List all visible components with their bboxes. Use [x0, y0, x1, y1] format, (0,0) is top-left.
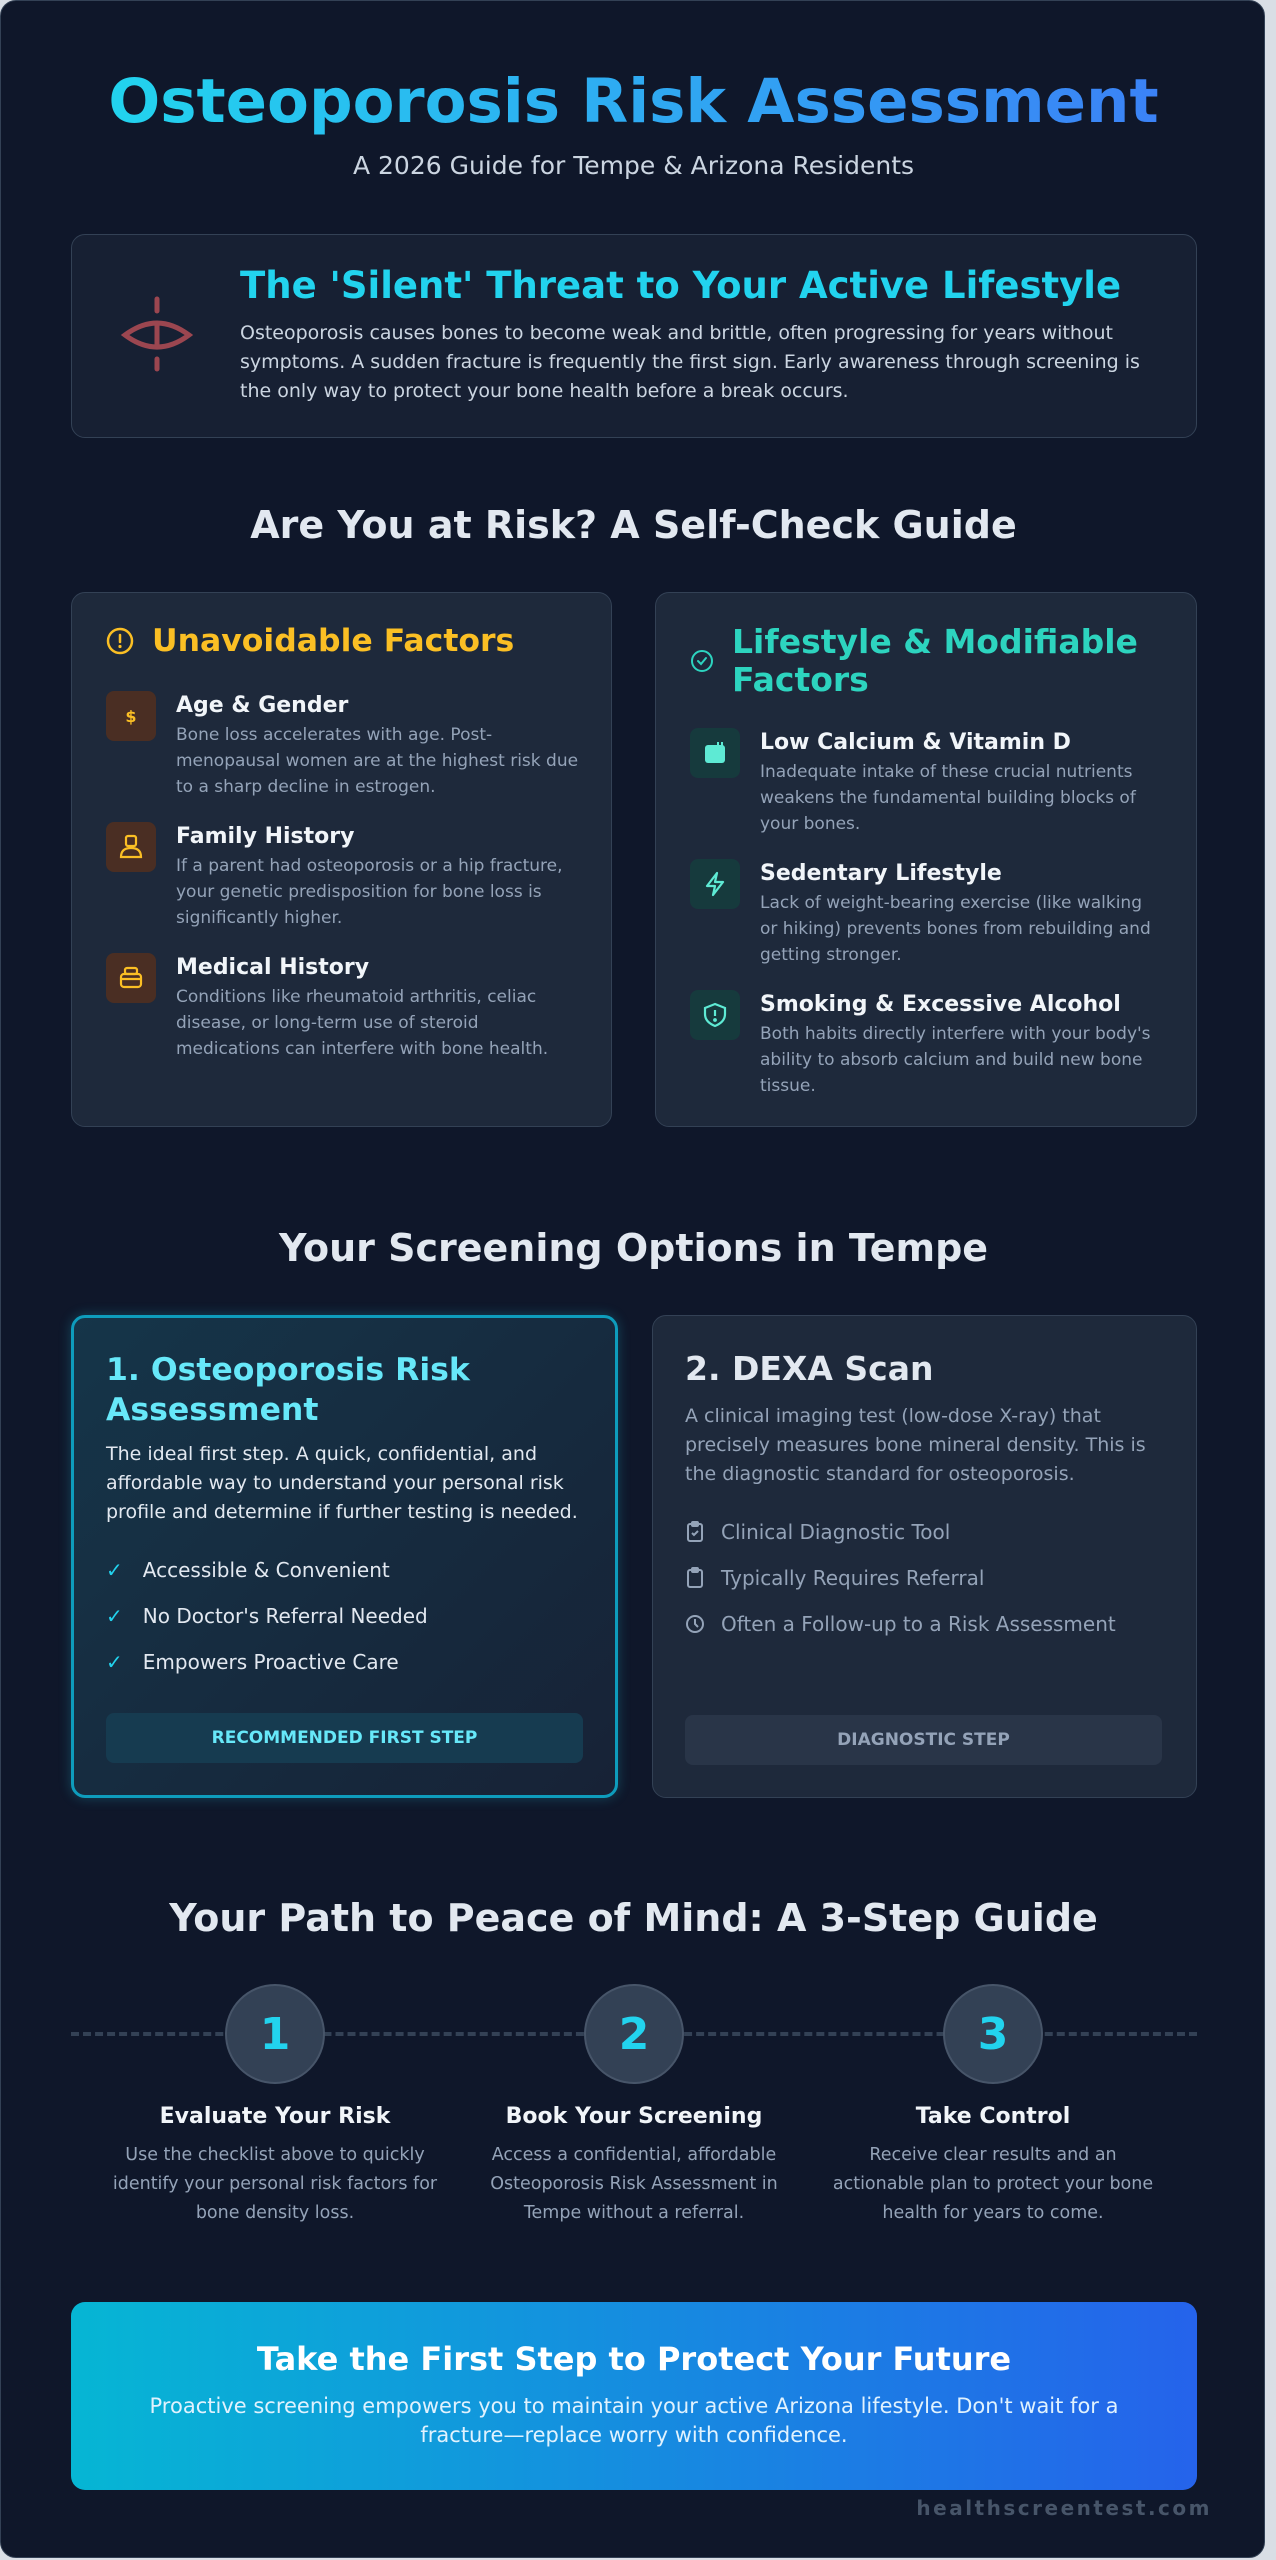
item: medical: Medical History	[176, 955, 369, 980]
heading: The 'Silent' Threat to Your Active Lifestyle	[240, 264, 1121, 307]
item: sedentary: Lack of weight-bearing exercise (like walking or hiking) prevents bones from rebuilding and getting stronger.	[760, 893, 1151, 965]
checklist: No Doctor's Referral Needed	[143, 1604, 428, 1628]
item: calcium: Inadequate intake of these crucial nutrients weakens the fundamental building blocks of your bones.	[760, 762, 1136, 834]
step 1: Evaluate Your Risk	[160, 2104, 390, 2129]
badge: RECOMMENDED FIRST STEP	[212, 1728, 477, 1748]
heading: 3-step guide: Your Path to Peace of Mind: A 3-Step Guide	[169, 1896, 1098, 1940]
step 3: Take Control	[916, 2104, 1070, 2129]
body text: Osteoporosis causes bones to become weak and brittle, often progressing for years without symptoms. A sudden fracture is frequently the first sign. Early awareness through screening is the only way to protect your bone health before a break occurs.	[240, 322, 1140, 402]
step 1: 1	[260, 2008, 290, 2060]
checklist: ✓	[106, 1558, 123, 1582]
feature list: Clinical Diagnostic Tool	[721, 1520, 950, 1544]
cta title: Take the First Step to Protect Your Future	[257, 2340, 1011, 2378]
heading: screening options: Your Screening Options in Tempe	[279, 1226, 988, 1270]
icon: eye	[121, 296, 193, 372]
card heading: 1. Osteoporosis Risk	[106, 1352, 470, 1388]
panel: DEXA option	[652, 1315, 1197, 1798]
card description: A clinical imaging test (low-dose X-ray) that precisely measures bone mineral density. This is the diagnostic standard for osteoporosis.	[685, 1405, 1146, 1485]
checklist: ✓	[106, 1650, 123, 1674]
checklist: Accessible & Convenient	[143, 1558, 390, 1582]
item: smoking	[690, 990, 1151, 1096]
checklist	[106, 1558, 428, 1674]
card heading: Assessment	[106, 1392, 318, 1428]
card description: The ideal first step. A quick, confidential, and affordable way to understand your personal risk profile and determine if further testing is needed.	[106, 1443, 578, 1523]
panel: unavoidable factors	[71, 592, 612, 1127]
step 1: Use the checklist above to quickly identify your personal risk factors for bone density loss.	[113, 2145, 437, 2223]
dashed connector line	[71, 2032, 1197, 2036]
badge	[106, 1713, 583, 1763]
item: age	[106, 691, 578, 797]
feature list: Often a Follow-up to a Risk Assessment	[721, 1612, 1116, 1636]
item: age: Bone loss accelerates with age. Post-menopausal women are at the highest risk due to a sharp decline in estrogen.	[176, 725, 578, 797]
card heading: 2. DEXA Scan	[685, 1349, 933, 1388]
footer brand: healthscreentest.com	[916, 2496, 1212, 2520]
panel heading	[691, 622, 1138, 699]
heading: self-check: Are You at Risk? A Self-Check Guide	[250, 503, 1017, 547]
step 2: Access a confidential, affordable Osteoporosis Risk Assessment in Tempe without a referral.	[490, 2145, 778, 2223]
item: smoking: Smoking & Excessive Alcohol	[760, 992, 1121, 1017]
cta text: Proactive screening empowers you to maintain your active Arizona lifestyle. Don't wait for a fracture—replace worry with confidence.	[150, 2394, 1118, 2447]
badge: DIAGNOSTIC STEP	[837, 1730, 1010, 1750]
card heading	[106, 1352, 470, 1428]
title: Osteoporosis Risk Assessment	[108, 66, 1159, 137]
panel: lifestyle factors	[655, 592, 1197, 1127]
checklist: ✓	[106, 1604, 123, 1628]
item: sedentary: Sedentary Lifestyle	[760, 861, 1002, 886]
item: medical	[106, 953, 548, 1059]
feature list: Typically Requires Referral	[721, 1566, 984, 1590]
item: smoking: Both habits directly interfere with your body's ability to absorb calcium and build new bone tissue.	[760, 1024, 1151, 1096]
step 1	[113, 1984, 438, 2223]
step 2: Book Your Screening	[506, 2104, 762, 2129]
item: calcium	[690, 728, 1136, 834]
item: family	[106, 822, 563, 928]
step 3: Receive clear results and an actionable plan to protect your bone health for years to come.	[833, 2145, 1153, 2223]
item: family: If a parent had osteoporosis or a hip fracture, your genetic predisposition for bone loss is significantly higher.	[176, 856, 563, 928]
panel heading: Lifestyle & Modifiable	[732, 622, 1138, 661]
subtitle: A 2026 Guide for Tempe & Arizona Residents	[353, 151, 914, 180]
item: medical: Conditions like rheumatoid arthritis, celiac disease, or long-term use of steroid medications can interfere with bone health.	[176, 987, 548, 1059]
feature list	[686, 1520, 1116, 1636]
item: age: Age & Gender	[176, 693, 348, 718]
item: family: Family History	[176, 824, 354, 849]
item: age: $	[125, 706, 137, 726]
checklist: Empowers Proactive Care	[143, 1650, 399, 1674]
item: sedentary	[690, 859, 1151, 965]
step 3: 3	[978, 2008, 1008, 2060]
step 3	[833, 1984, 1153, 2223]
panel heading: Unavoidable Factors	[152, 623, 514, 659]
panel: risk assessment option	[71, 1315, 618, 1798]
badge	[685, 1715, 1162, 1765]
item: calcium: Low Calcium & Vitamin D	[760, 730, 1071, 755]
step 2: 2	[619, 2008, 649, 2060]
panel heading: Factors	[732, 660, 869, 699]
step 2	[490, 1984, 778, 2223]
call to action banner	[71, 2302, 1197, 2490]
panel: silent threat	[71, 234, 1197, 438]
